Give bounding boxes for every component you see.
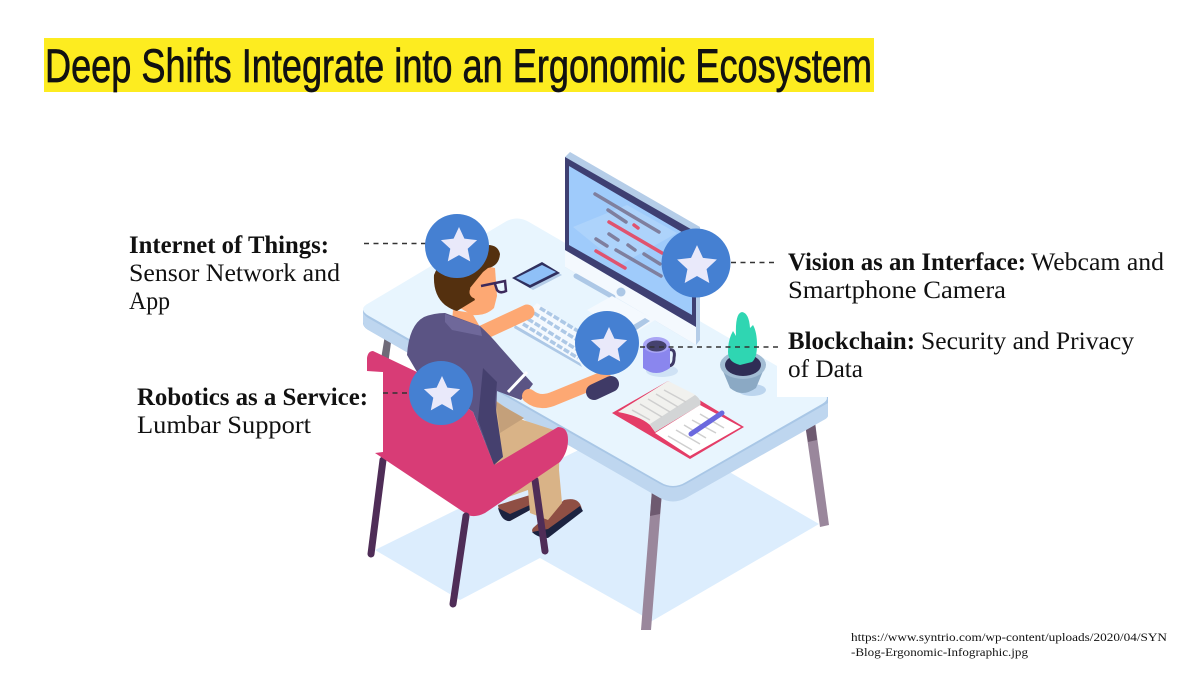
label: Vision as an Interface: Smartphone Camera bbox=[788, 275, 1006, 304]
pen bbox=[691, 413, 722, 434]
floor shadow bbox=[375, 420, 819, 621]
person bbox=[407, 245, 604, 538]
monitor bbox=[565, 152, 700, 345]
dashed connector: Internet of Things bbox=[364, 242, 426, 244]
label: Blockchain bbox=[788, 326, 1134, 383]
source citation bbox=[851, 630, 1167, 659]
coffee cup bbox=[643, 337, 678, 377]
potted plant bbox=[720, 312, 766, 396]
label: Internet of Things bbox=[129, 230, 340, 315]
front arm bbox=[529, 378, 604, 401]
icon: star badge Robotics as a Service bbox=[409, 361, 473, 425]
monitor screen code lines bbox=[595, 194, 662, 276]
label: Robotics as a Service: Robotics as a Service: bbox=[137, 382, 368, 411]
shoes bbox=[498, 495, 583, 538]
neck bbox=[452, 310, 480, 327]
label: Robotics as a Service: Lumbar Support bbox=[137, 410, 311, 439]
label: Blockchain: Blockchain: bbox=[788, 326, 915, 355]
source citation: https://www.syntrio.com/wp-content/uploads/2020/04/SYN bbox=[851, 630, 1167, 644]
label: Blockchain: Security and Privacy bbox=[921, 326, 1134, 355]
chair rear right leg bbox=[535, 480, 545, 551]
back arm bbox=[484, 312, 527, 332]
label: Internet of Things: Internet of Things: bbox=[129, 230, 329, 259]
label: Blockchain: of Data bbox=[788, 354, 863, 383]
glasses bbox=[481, 281, 506, 292]
desk bbox=[363, 218, 828, 502]
label: Vision as an Interface: Vision as an Interface: bbox=[788, 247, 1026, 276]
icon: star badge Vision as an Interface bbox=[662, 228, 730, 298]
label: Vision as an Interface bbox=[788, 247, 1164, 304]
dashed connector: Robotics as a Service bbox=[383, 392, 411, 394]
face bbox=[455, 262, 497, 315]
monitor stand bbox=[576, 276, 613, 297]
label: Internet of Things: App bbox=[129, 286, 170, 315]
mouse pad bbox=[594, 384, 611, 392]
torso bbox=[407, 313, 533, 465]
phone bbox=[512, 262, 562, 290]
chair rear left leg bbox=[371, 460, 383, 554]
hair bbox=[434, 245, 500, 311]
dashed connector: Vision as an Interface bbox=[731, 262, 778, 264]
chair bbox=[367, 351, 568, 604]
book bbox=[612, 381, 744, 459]
label: Robotics as a Service bbox=[137, 382, 368, 439]
desk legs bbox=[380, 335, 829, 630]
keyboard bbox=[514, 303, 600, 367]
icon: star badge Blockchain bbox=[575, 311, 639, 375]
front chair leg bbox=[453, 516, 466, 604]
dashed connector: Blockchain bbox=[640, 346, 778, 348]
source citation: -Blog-Ergonomic-Infographic.jpg bbox=[851, 645, 1028, 659]
trousers bbox=[480, 400, 562, 520]
illustration: ergonomic desk workstation bbox=[363, 152, 829, 630]
label: Vision as an Interface: Webcam and bbox=[1031, 247, 1164, 276]
title: Deep Shifts Integrate into an Ergonomic Ecosystem bbox=[45, 39, 872, 92]
white text backgrounds bbox=[340, 300, 897, 452]
icon: star badge Internet of Things bbox=[425, 214, 489, 278]
label: Internet of Things: Sensor Network and bbox=[129, 258, 340, 287]
